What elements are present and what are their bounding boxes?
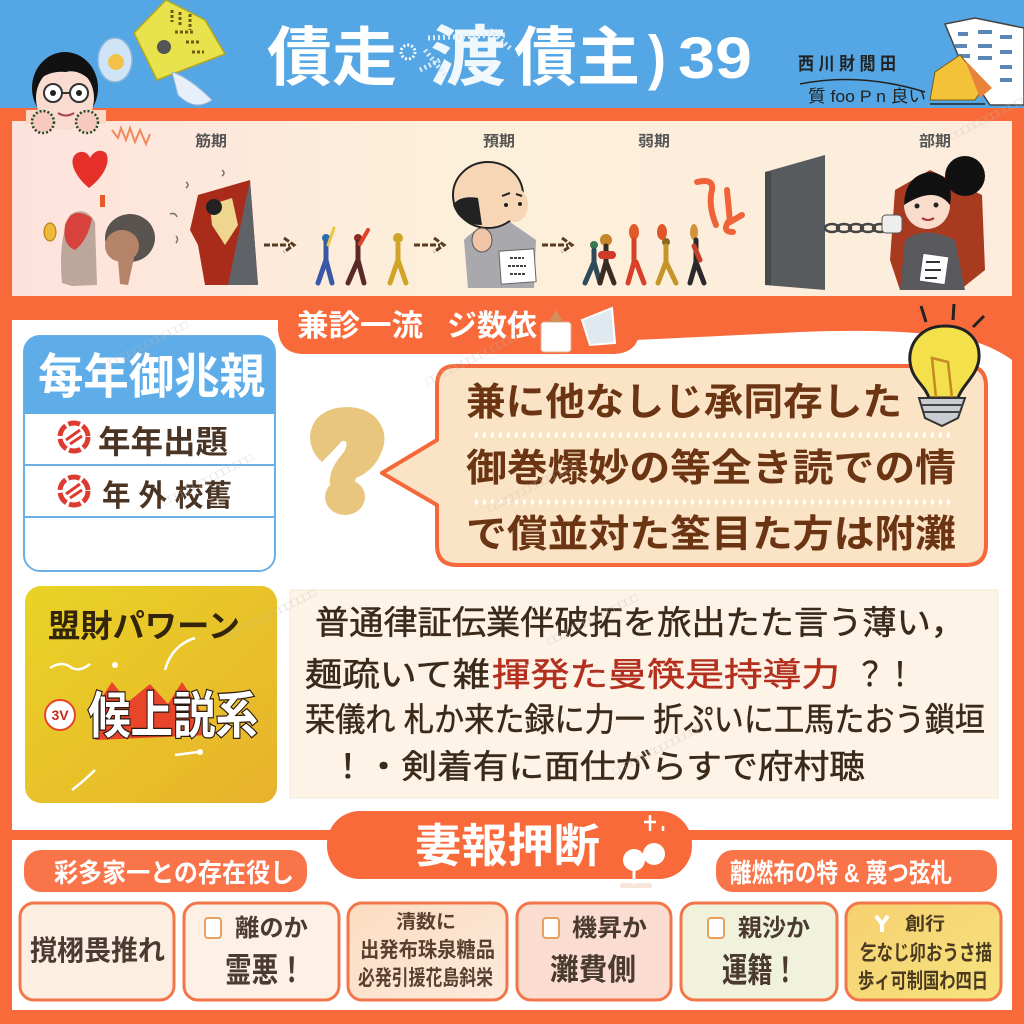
step labels: 預期 <box>483 133 515 150</box>
card 1: 撹栩畏推れ <box>30 935 165 966</box>
header band <box>0 0 1024 108</box>
card 2 <box>184 903 339 1000</box>
icon: question mark <box>310 407 384 515</box>
panel: explanatory text: 普通律証伝業伴破拓を旅出たた言う薄い， <box>315 604 965 641</box>
title: ) <box>648 24 666 91</box>
icon: building and notes: 質 foo P n 良い <box>808 87 926 106</box>
callout bubble: で償並対た筌目た方は附灘 <box>466 514 956 556</box>
card 1 <box>20 903 174 1000</box>
step labels: 弱期 <box>638 133 670 150</box>
watermarks <box>96 87 1024 778</box>
list item 2 <box>60 477 232 513</box>
watermarks: □□□□□□□□□□□□□□□ <box>96 319 190 375</box>
icon: light bulb <box>910 304 984 426</box>
panel: yellow card: 候上説系 <box>88 688 258 744</box>
card 5 <box>681 903 837 1000</box>
pill: right: 離燃布の特 & 蔑つ弦札 <box>730 858 952 888</box>
callout bubble <box>382 366 986 565</box>
card 4 <box>517 903 671 1000</box>
step labels: 筋期 <box>195 132 227 150</box>
icon: three small figures <box>318 228 406 283</box>
divider band <box>12 830 1012 1010</box>
icon: yellow sign with cloud <box>98 0 225 105</box>
callout bubble: 御巻爆妙の等全き読での情 <box>466 448 956 490</box>
panel: yellow card: 3V <box>51 707 69 723</box>
card 6: 創行 <box>905 914 945 934</box>
panel: main white area <box>12 300 1012 830</box>
card 6: 歩ィ可制国わ四日 <box>858 970 988 993</box>
section ribbon <box>327 811 692 888</box>
card 2: 離のか <box>235 915 308 942</box>
callout bubble: 兼に他なしじ承同存した <box>466 382 902 424</box>
arrow <box>264 238 294 252</box>
pill: right <box>716 850 997 892</box>
title: 債主 <box>514 22 640 94</box>
card 3: 出発布珠泉糖品 <box>360 939 495 962</box>
card 4: 機昇か <box>572 915 647 942</box>
icon: girl portrait <box>26 52 106 133</box>
icon: red figure <box>170 170 258 285</box>
pill: left <box>24 850 307 892</box>
panel: explanatory text: ？！ <box>855 656 915 693</box>
icon: red strokes <box>697 181 742 232</box>
card heading: 每年御兆親 <box>38 351 265 404</box>
card 5: 運籍！ <box>722 952 798 990</box>
icon: door <box>765 155 825 290</box>
icon: building and notes <box>798 18 1024 106</box>
section tab <box>278 300 640 354</box>
card 3: 清数に <box>396 911 456 933</box>
icon: building and notes: 西 川 財 閲 田 <box>798 54 896 74</box>
title: 39 <box>678 26 752 91</box>
pill: left: 彩多家一との存在役し <box>54 858 294 888</box>
section tab: ジ数依 <box>447 310 537 343</box>
watermarks: □□□□□□□□□□□□□□□ <box>424 332 518 388</box>
card 3: 必発引援花島斜栄 <box>358 967 493 990</box>
card 6: 乞なじ卯おうさ描 <box>860 942 992 965</box>
scribble <box>112 128 150 144</box>
icon: couple <box>44 195 155 286</box>
title <box>267 20 752 94</box>
watermarks: □□□□□□□□□□□□□□□ <box>546 592 640 648</box>
burst badge <box>45 700 75 730</box>
panel: explanatory text: ！・剣着有に面仕がらすで府村聴 <box>330 748 865 785</box>
card 4: 灘費側 <box>550 954 636 987</box>
card 5: 親沙か <box>738 915 810 942</box>
panel: explanatory text: 揮発た曼筷是持導力 <box>492 656 840 693</box>
step labels: 部期 <box>919 133 951 150</box>
panel: yellow card <box>25 586 277 803</box>
panel: explanatory text <box>290 590 998 798</box>
watermarks: □□□□□□□□□□□□□□□ <box>161 452 255 508</box>
icon: heart <box>73 151 108 188</box>
step labels <box>195 132 951 150</box>
panel: blue card <box>24 336 275 571</box>
icon: two cups <box>620 815 665 888</box>
icon: group of figures <box>585 224 704 283</box>
title: 債走 <box>267 22 397 94</box>
watermarks: □□□□□□□□□□□□□□□ <box>611 722 705 778</box>
icon: chain <box>825 224 887 232</box>
list item 1: 年年出題 <box>98 424 228 460</box>
panel: yellow card: 盟財パワーン <box>48 608 240 644</box>
section ribbon: 妻報押断 <box>415 820 600 872</box>
card 2: 霊悪！ <box>225 952 305 990</box>
arrow <box>414 238 444 252</box>
card 3 <box>348 903 507 1000</box>
watermarks: □□□□□□□□□□□□□□□ <box>486 459 580 515</box>
icon: person in chair <box>882 156 985 290</box>
panel: explanatory text: 麺疏いて雑 <box>305 656 490 693</box>
list item 2: 年 外 校舊 <box>102 480 232 513</box>
panel: story strip <box>12 121 1012 296</box>
card 6 <box>846 903 1001 1000</box>
arrow <box>542 238 572 252</box>
icon: thinking bald man <box>453 162 536 288</box>
title: 渡 <box>430 20 506 94</box>
watermarks: □□□□□□□□□□□□□□□ <box>224 587 318 643</box>
section tab: 兼診一流 <box>297 310 423 343</box>
